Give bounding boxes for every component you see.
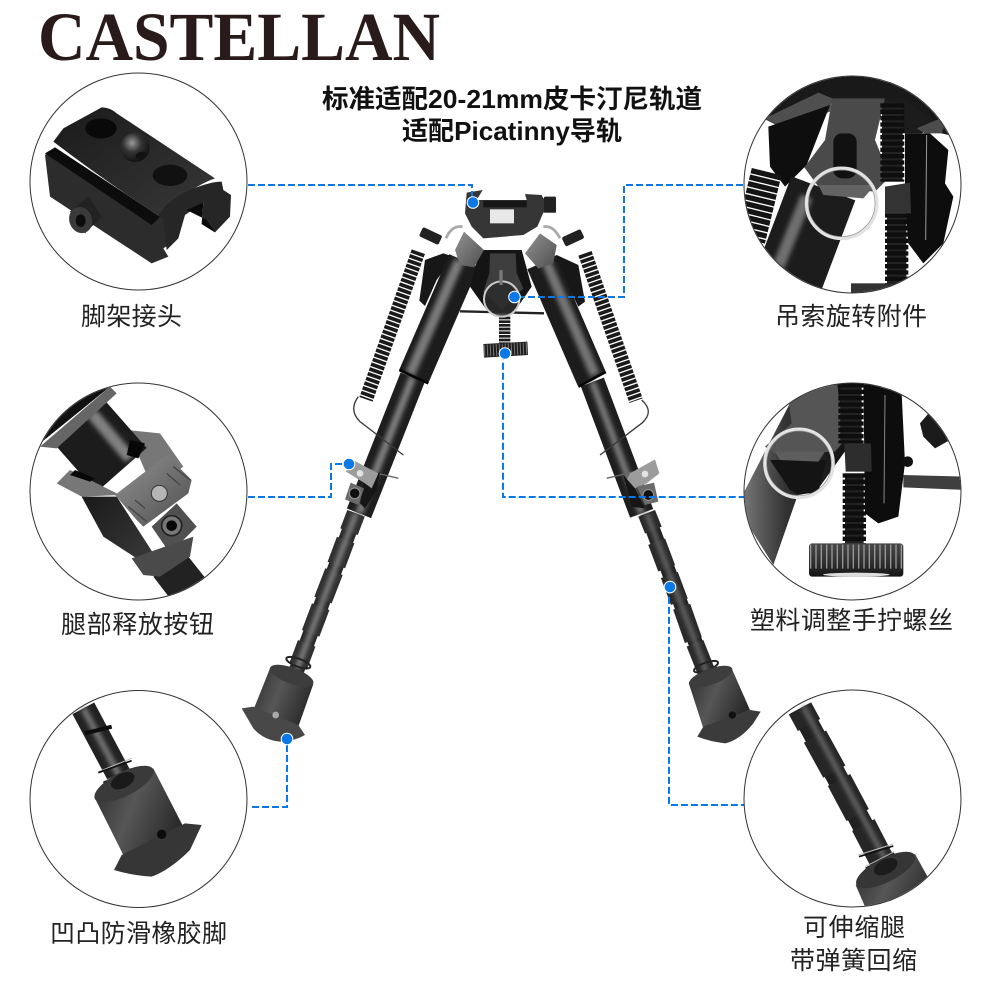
label: 凹凸防滑橡胶脚 bbox=[50, 920, 227, 948]
label: 塑料调整手拧螺丝 bbox=[750, 607, 953, 635]
label: 可伸缩腿 bbox=[803, 914, 905, 942]
detail image: knob screw bbox=[743, 380, 965, 577]
label: 脚架接头 bbox=[81, 303, 182, 331]
circle outline bbox=[30, 73, 247, 290]
callout leader lines bbox=[248, 185, 744, 807]
label: 吊索旋转附件 bbox=[775, 303, 927, 331]
detail image: telescoping leg bbox=[800, 707, 935, 923]
heading: rail compatibility: 标准适配20-21mm皮卡汀尼轨道 bbox=[322, 84, 702, 114]
panel: rubber foot bbox=[30, 690, 247, 948]
main bipod illustration bbox=[242, 190, 761, 743]
panel: telescoping leg bbox=[744, 690, 961, 975]
label: 腿部释放按钮 bbox=[61, 611, 214, 639]
label: 带弹簧回缩 bbox=[790, 947, 917, 975]
circle outline bbox=[30, 383, 247, 600]
detail image: rubber foot bbox=[83, 708, 202, 877]
detail image: sling swivel bbox=[745, 76, 954, 292]
circle outline bbox=[30, 690, 247, 908]
detail image: rail adapter bbox=[45, 107, 231, 263]
upper bipod assembly bbox=[354, 190, 648, 513]
brand logo: CASTELLAN: CASTELLAN bbox=[38, 0, 440, 75]
heading: rail compatibility bbox=[322, 84, 702, 146]
detail image: release button bbox=[40, 387, 204, 596]
circle outline bbox=[744, 690, 961, 907]
panel: sling swivel bbox=[744, 76, 962, 328]
label bbox=[790, 914, 917, 975]
panel: adjustment knob bbox=[743, 380, 965, 635]
panel: rail adapter bbox=[30, 73, 247, 331]
leg release brackets bbox=[345, 459, 659, 508]
circle outline bbox=[744, 383, 961, 600]
heading: rail compatibility: 适配Picatinny导轨 bbox=[402, 116, 622, 146]
panel: leg release button bbox=[30, 380, 247, 639]
left telescoping leg and foot bbox=[242, 513, 356, 742]
callout dots bbox=[281, 197, 676, 745]
circle outline bbox=[744, 76, 961, 293]
right telescoping leg and foot bbox=[647, 513, 761, 743]
